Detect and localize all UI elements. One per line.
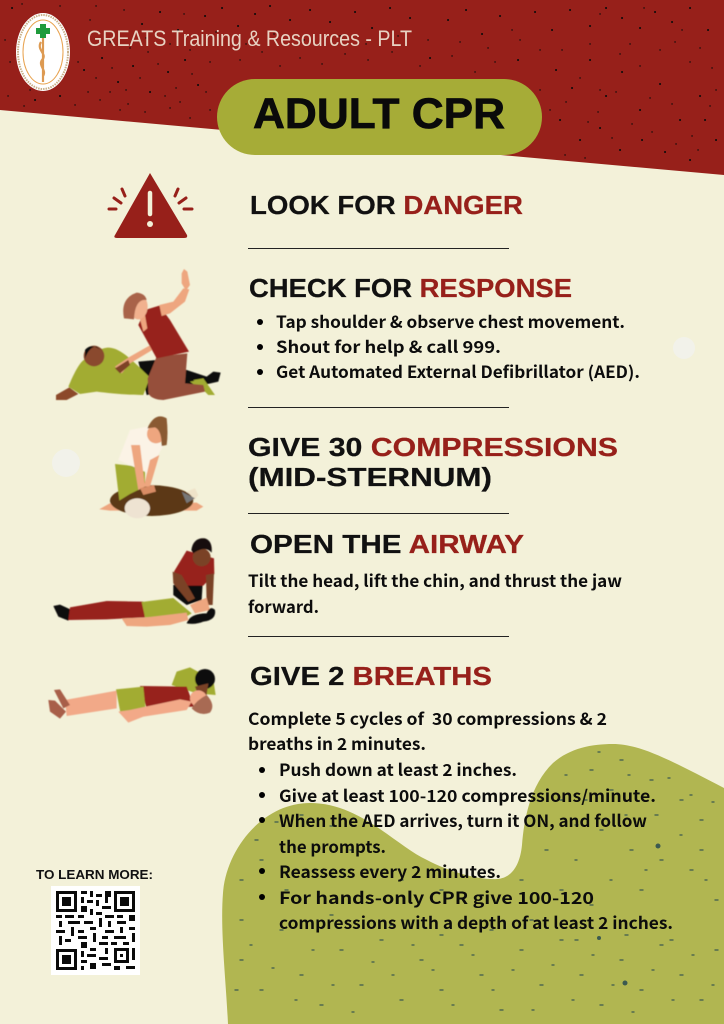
breaths bullets: Give at least 100-120 compressions/minute. xyxy=(279,783,656,807)
heading: give 30 compressions: (MID-STERNUM) xyxy=(248,462,492,492)
header text: GREATS Training & Resources - PLT xyxy=(87,26,412,51)
logo xyxy=(16,13,70,91)
green blob background xyxy=(222,744,724,1024)
breaths bullets: For hands-only CPR give 100-120 xyxy=(279,885,594,909)
breaths bullets: the prompts. xyxy=(279,834,386,858)
illustration: check response xyxy=(56,269,221,400)
breaths bullets: Push down at least 2 inches. xyxy=(279,757,517,781)
QR code xyxy=(51,886,140,975)
learn more label: TO LEARN MORE: xyxy=(36,867,153,882)
airway text: forward. xyxy=(248,594,319,618)
heading: give 30 compressions xyxy=(248,432,618,492)
heading: check for response: CHECK FOR RESPONSE xyxy=(249,273,572,303)
pale circle right xyxy=(673,337,695,359)
heading: open the airway: OPEN THE AIRWAY xyxy=(250,529,524,559)
response bullets: Get Automated External Defibrillator (AED). xyxy=(276,359,640,383)
breaths intro text: breaths in 2 minutes. xyxy=(248,731,426,755)
response bullets: Shout for help & call 999. xyxy=(276,334,501,358)
illustration: give breaths xyxy=(48,667,216,723)
airway text: Tilt the head, lift the chin, and thrust the jaw xyxy=(248,568,622,592)
breaths bullets: When the AED arrives, turn it ON, and follow xyxy=(279,808,647,832)
breaths bullets: Reassess every 2 minutes. xyxy=(279,859,501,883)
breaths bullets: compressions with a depth of at least 2 inches. xyxy=(279,910,673,934)
title pill: ADULT CPR xyxy=(253,90,505,138)
illustration: open airway xyxy=(53,538,215,627)
response bullets: Tap shoulder & observe chest movement. xyxy=(276,309,625,333)
airway text xyxy=(248,568,622,618)
title pill xyxy=(217,79,542,155)
red header background xyxy=(0,0,724,175)
icon: warning triangle xyxy=(109,173,192,238)
pale circle left xyxy=(52,449,80,477)
breaths intro text xyxy=(248,706,607,755)
breaths bullets xyxy=(259,757,673,934)
heading: give 2 breaths: GIVE 2 BREATHS xyxy=(250,661,492,691)
illustration: compressions xyxy=(99,416,203,518)
response bullets xyxy=(257,309,640,383)
heading: give 30 compressions: GIVE 30 COMPRESSIONS xyxy=(248,432,618,462)
breaths intro text: Complete 5 cycles of 30 compressions & 2 xyxy=(248,706,607,730)
heading: look for danger: LOOK FOR DANGER xyxy=(250,190,523,220)
